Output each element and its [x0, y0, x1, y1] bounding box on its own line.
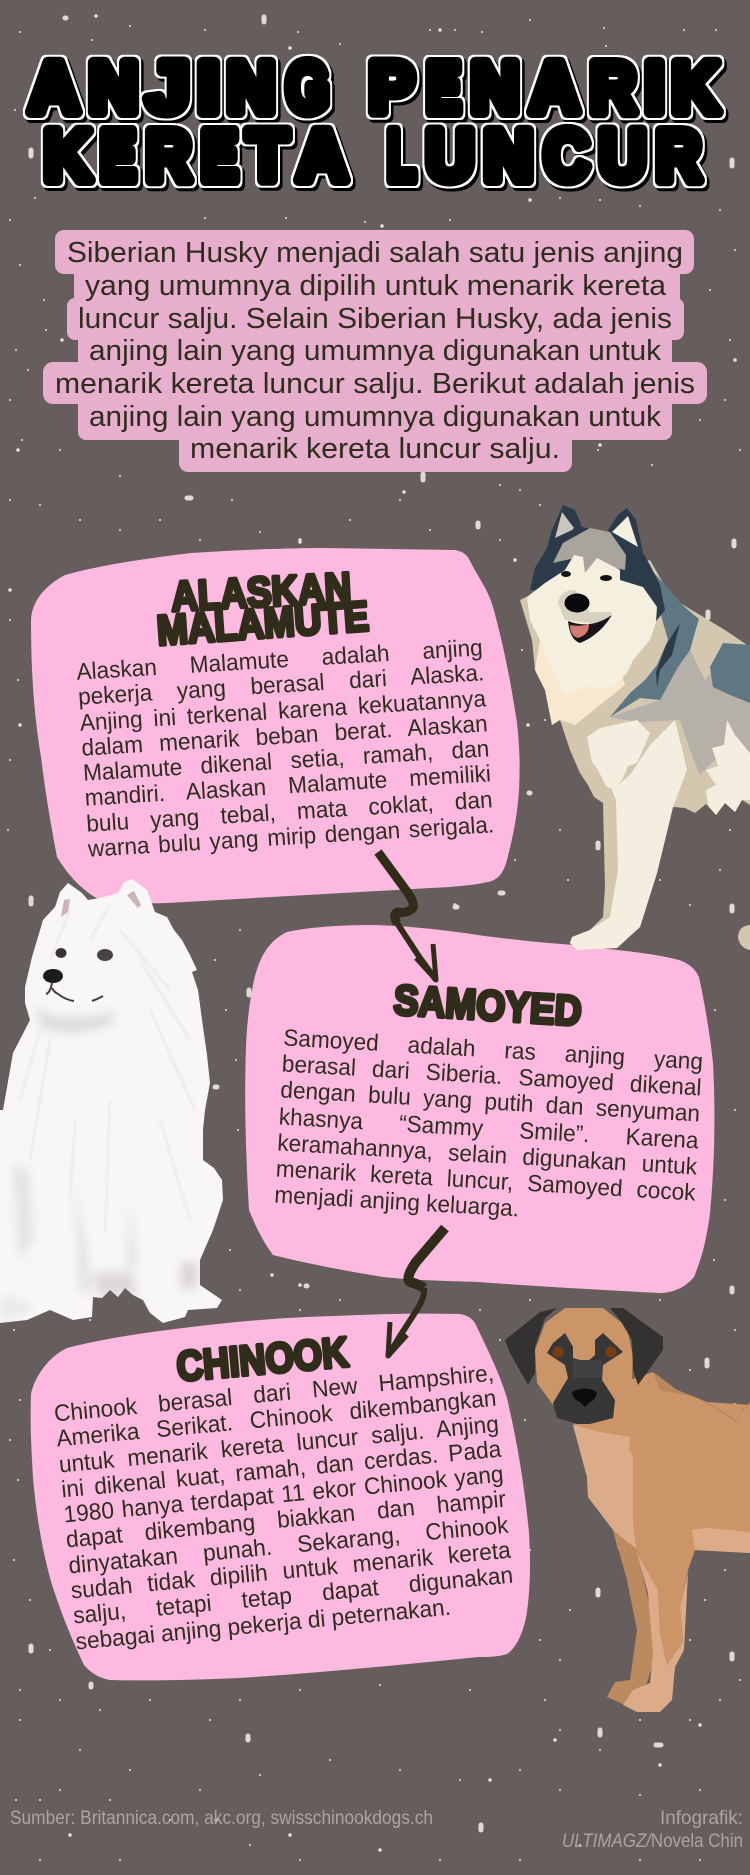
husky inner ears [555, 512, 574, 538]
body text: Alaskan Malamute: mandiri. Alaskan Malamute memiliki [84, 761, 492, 811]
title: L [387, 117, 416, 196]
husky grey flank [610, 640, 750, 775]
intro lines: Siberian Husky menjadi salah satu jenis anjing [67, 237, 683, 269]
samoyed mouth [46, 983, 103, 1001]
body text: Alaskan Malamute: Malamute dikenal setia, ramah, dan [82, 735, 490, 786]
husky tan chest fur [535, 640, 625, 725]
panel: Chinook [31, 1314, 530, 1680]
husky eye right [600, 575, 612, 581]
samoyed fur strokes [20, 905, 195, 1230]
husky right blue patch [710, 643, 750, 703]
chinook nose [572, 1388, 597, 1407]
body text: Samoyed [274, 1024, 704, 1222]
samoyed inner ears [61, 899, 70, 917]
husky face cream [527, 555, 657, 695]
intro lines: menarik kereta luncur salju. Berikut adalah jenis [55, 368, 695, 400]
husky right tan shoulder [690, 615, 750, 680]
husky nose [564, 594, 590, 612]
husky back paw [738, 925, 750, 950]
icon: chinook dog [505, 1308, 750, 1712]
husky body base [520, 560, 750, 950]
chinook eye left [552, 1346, 564, 1358]
body text: Alaskan Malamute: pekerja yang berasal dari Alaska. [77, 660, 485, 710]
samoyed fur body [0, 879, 223, 1323]
intro highlight rows [43, 230, 707, 472]
husky blue-grey mane [610, 568, 700, 717]
body text: Chinook: untuk menarik kereta luncur salju. Anjing [58, 1410, 500, 1477]
body text: Chinook: sebagai anjing pekerja di peternakan. [74, 1593, 452, 1654]
chinook eye right [606, 1346, 616, 1358]
body text: Alaskan Malamute [76, 634, 495, 862]
icon: samoyed [0, 879, 223, 1323]
title: N [227, 49, 275, 128]
body text: Alaskan Malamute: bulu yang tebal, mata coklat, dan [86, 786, 493, 836]
heading: Alaskan Malamute: ALASKAN [170, 564, 352, 620]
body text: Alaskan Malamute: Anjing ini terkenal karena kekuatannya [79, 685, 487, 735]
samoyed eye left [56, 948, 66, 958]
heading: Alaskan Malamute: MALAMUTE [155, 592, 370, 654]
body text: Alaskan Malamute: Alaskan Malamute adalah anjing [76, 634, 483, 685]
title: J [147, 49, 189, 128]
body text: Alaskan Malamute: warna bulu yang mirip dengan serigala. [87, 811, 495, 862]
title: N [471, 49, 519, 128]
body text: Samoyed: Samoyed adalah ras anjing yang [283, 1024, 704, 1074]
title: A [29, 49, 79, 128]
body text: Chinook: dinyatakan punah. Sekarang, Chinook [67, 1511, 509, 1578]
title: U [599, 117, 646, 196]
panel: Alaskan Malamute [31, 548, 520, 903]
intro lines: luncur salju. Selain Siberian Husky, ada jenis [78, 303, 672, 335]
body text: Chinook: sudah tidak dipilih untuk menarik kereta [70, 1537, 512, 1604]
husky tongue [570, 624, 589, 638]
title: A [297, 117, 347, 196]
title: R [146, 117, 191, 196]
intro lines: anjing lain yang umumnya digunakan untuk [89, 401, 662, 433]
chinook ears [505, 1308, 557, 1385]
heading: Chinook: CHINOOK [175, 1328, 350, 1390]
body text: Chinook: Amerika Serikat. Chinook dikembangkan [55, 1385, 497, 1452]
title: R [656, 117, 701, 196]
husky dark streak [656, 623, 680, 687]
husky right cream fur [706, 720, 750, 815]
dog illustrations [0, 505, 750, 1712]
husky dark hood [530, 505, 665, 627]
husky eye [561, 571, 571, 577]
title: K [44, 117, 91, 196]
title: N [89, 49, 138, 128]
chinook head [535, 1308, 633, 1425]
title: E [201, 117, 238, 196]
body text: Chinook: ini dikenal kuat, ramah, dan cerdas. Pada [60, 1435, 502, 1502]
samoyed soft shading [0, 905, 198, 1320]
husky foreleg [570, 720, 687, 950]
chinook mask [547, 1333, 623, 1424]
chinook belly [692, 1528, 750, 1553]
chinook light chest [573, 1425, 636, 1548]
intro lines: yang umumnya dipilih untuk menarik kereta [85, 270, 666, 302]
husky mouth [568, 615, 612, 643]
body text: Samoyed: menjadi anjing keluarga. [274, 1182, 520, 1222]
heading: Alaskan Malamute [155, 564, 370, 654]
arrow: Samoyed to Chinook [388, 1228, 445, 1356]
chinook shoulder shadow [653, 1372, 750, 1422]
intro lines: menarik kereta luncur salju. [190, 433, 560, 465]
title: A [530, 49, 579, 128]
chinook foreleg dark [607, 1530, 653, 1705]
title: U [426, 117, 474, 196]
body text: Chinook: Chinook berasal dari New Hampshire, [53, 1360, 495, 1426]
body text: Chinook [53, 1360, 514, 1654]
title: I [198, 49, 219, 128]
icon: husky [520, 505, 750, 950]
body text: Chinook: salju, tetapi tetap dapat digunakan [72, 1562, 514, 1629]
title: P [369, 49, 414, 128]
title: R [590, 49, 636, 128]
title: T [247, 117, 288, 196]
title: K [672, 49, 719, 128]
chinook body [573, 1372, 750, 1665]
panel: Samoyed [245, 925, 714, 1293]
samoyed eye right [97, 949, 113, 961]
arrow: Alaskan to Samoyed [378, 852, 436, 980]
body text: Chinook: dapat dikembang biakkan dan hampir [65, 1486, 507, 1553]
body text: Samoyed: khasnya “Sammy Smile”. Karena [278, 1103, 699, 1153]
husky chest patch [587, 720, 650, 790]
title: C [544, 117, 589, 196]
body text: Samoyed: berasal dari Siberia. Samoyed dikenal [281, 1051, 702, 1101]
husky head grey [553, 528, 626, 578]
title: G [286, 49, 329, 128]
chinook foreleg light [623, 1553, 688, 1712]
title: N [484, 117, 533, 196]
source line: Sumber: Britannica.com, akc.org, swisschinookdogs.ch [10, 1808, 433, 1829]
husky snout [558, 590, 612, 623]
body text: Samoyed: menarik kereta luncur, Samoyed cocok [275, 1155, 696, 1205]
infographic credit: Infografik: [660, 1808, 743, 1829]
credits: ULTIMAGZ/Novela Chin [562, 1831, 743, 1852]
intro lines [55, 237, 695, 465]
title: E [426, 49, 461, 128]
title: E [100, 117, 136, 196]
chinook muzzle bridge [573, 1360, 602, 1378]
heading: Samoyed: SAMOYED [392, 976, 583, 1034]
body text: Samoyed: keramahannya, selain digunakan untuk [277, 1129, 698, 1179]
samoyed nose [43, 969, 63, 983]
body text: Chinook: 1980 hanya terdapat 11 ekor Chinook yang [62, 1461, 505, 1528]
intro lines: anjing lain yang umumnya digunakan untuk [89, 335, 662, 367]
title: I [645, 49, 664, 128]
body text: Samoyed: dengan bulu yang putih dan senyuman [280, 1077, 701, 1127]
body text: Alaskan Malamute: dalam menarik beban berat. Alaskan [81, 710, 488, 761]
